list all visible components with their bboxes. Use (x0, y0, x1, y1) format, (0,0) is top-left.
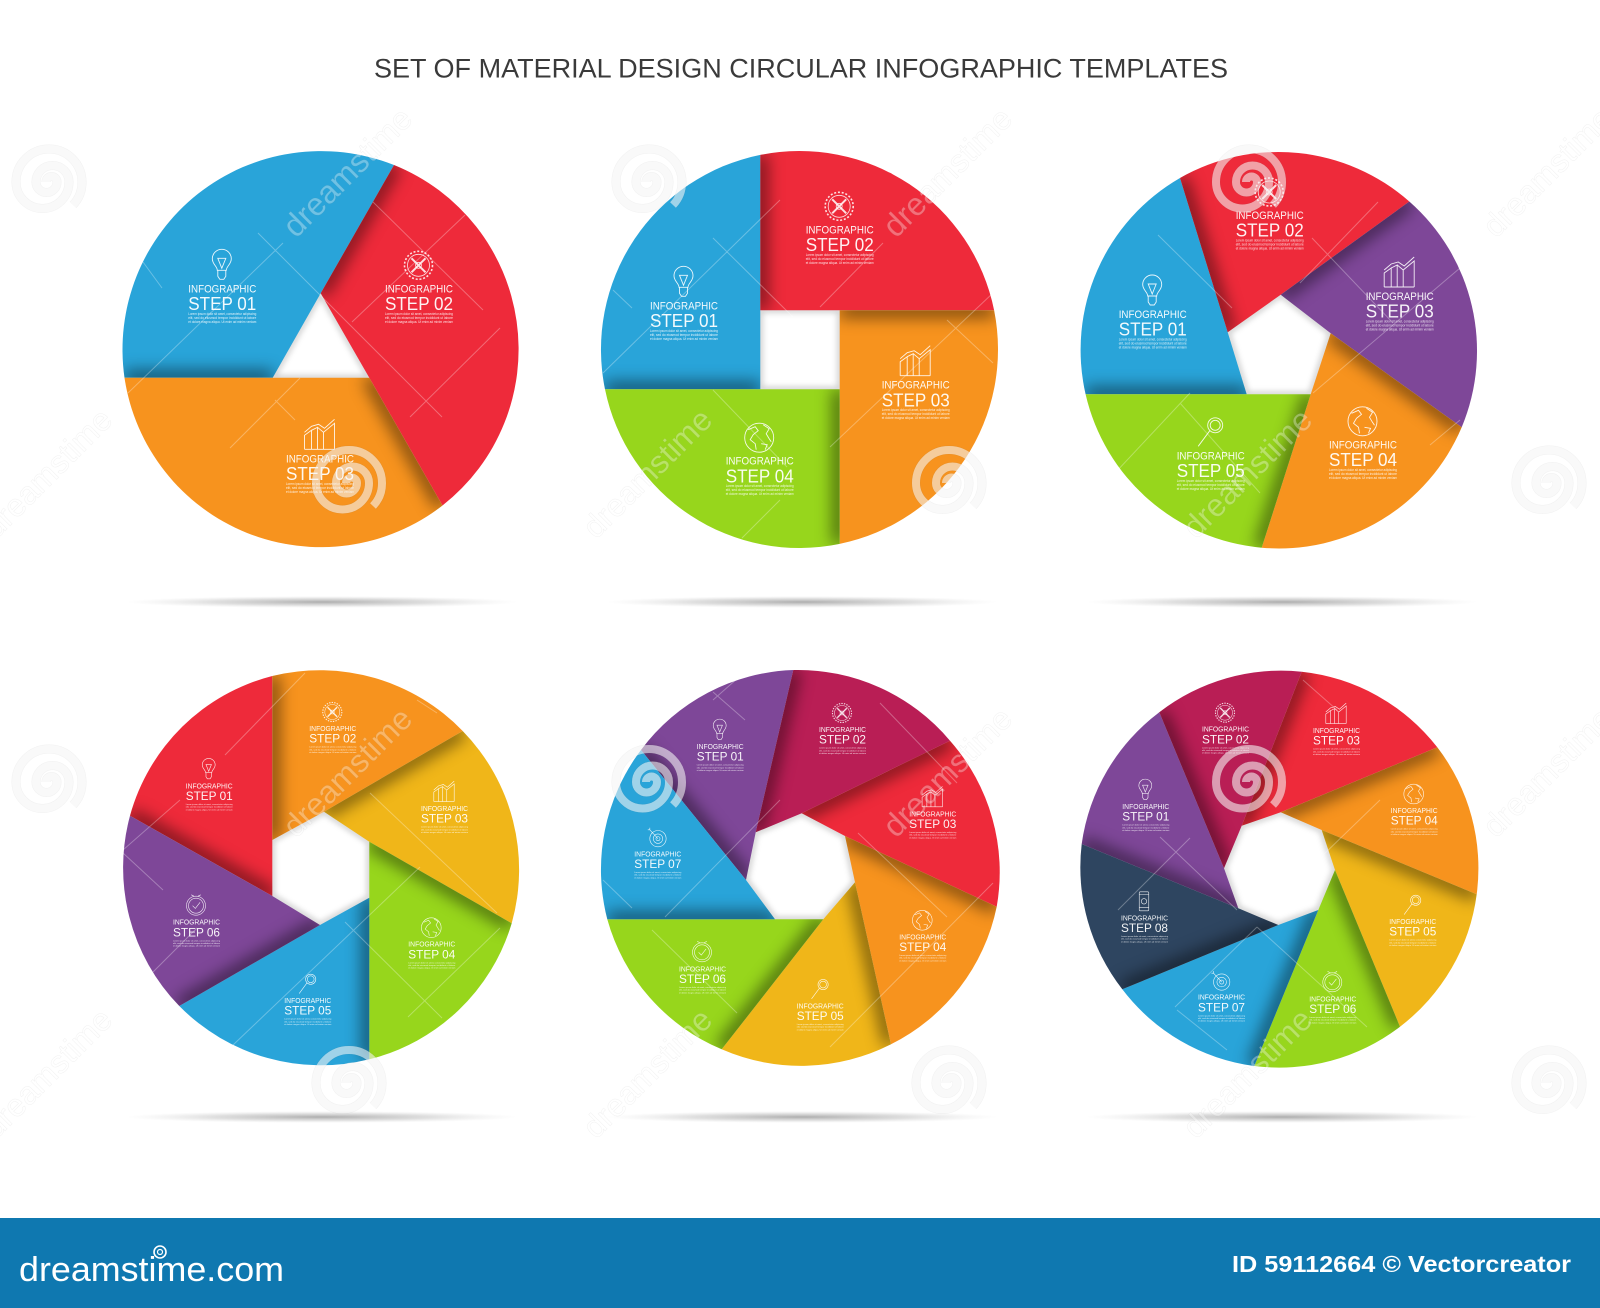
watermark overlay: dreamstime (875, 700, 1019, 844)
label: step 04 (726, 423, 794, 496)
label: step 06: et dolore magna aliqua. Ut enim ad minim veniam (1309, 1021, 1356, 1024)
segment: step 04 green (369, 842, 512, 1059)
label: step 02 (1236, 178, 1304, 250)
segment: step 03 red (802, 741, 1000, 907)
segment: step 01 blue (601, 155, 760, 389)
label: step 07: Lorem ipsum dolor sit amet, consectetur adipiscing (1198, 1014, 1246, 1017)
label: step 02: elit, sed do eiusmod tempor incididunt ut labore (806, 257, 874, 261)
label: step 03: elit, sed do eiusmod tempor incididunt ut labore (421, 828, 469, 831)
label: step 04: STEP 04 (899, 940, 947, 954)
label: step 07: et dolore magna aliqua. Ut enim ad minim veniam (1198, 1020, 1245, 1023)
label: step 01: et dolore magna aliqua. Ut enim ad minim veniam (1119, 346, 1187, 350)
label: step 02: STEP 02 (309, 732, 357, 746)
label: step 07: STEP 07 (1198, 1000, 1245, 1014)
segment: step 01 red (130, 676, 272, 896)
label: step 04: Lorem ipsum dolor sit amet, consectetur adipiscing (726, 484, 794, 488)
label: step 03: Lorem ipsum dolor sit amet, consectetur adipiscing (421, 826, 469, 829)
segment: step 03 orange (840, 310, 998, 544)
label: step 03 (1313, 703, 1361, 756)
label: step 03: et dolore magna aliqua. Ut enim ad minim veniam (1366, 328, 1434, 332)
wheel: 7 steps (601, 670, 1000, 1066)
segment: step 03 red (1242, 672, 1437, 826)
label: step 02: INFOGRAPHIC (385, 283, 453, 295)
label: step 03 (1366, 257, 1434, 332)
label: step 05: Lorem ipsum dolor sit amet, consectetur adipiscing (1177, 479, 1245, 483)
label: step 05: STEP 05 (1177, 461, 1245, 481)
label: step 04: STEP 04 (1329, 450, 1397, 470)
segment: step 08 navy (1080, 844, 1278, 989)
label: step 06: Lorem ipsum dolor sit amet, consectetur adipiscing (679, 986, 727, 989)
label: step 05: STEP 05 (1389, 925, 1437, 939)
label: step 04: et dolore magna aliqua. Ut enim ad minim veniam (1391, 833, 1438, 836)
label: step 05: Lorem ipsum dolor sit amet, consectetur adipiscing (1389, 939, 1437, 942)
label: step 05 (284, 974, 332, 1026)
segment: step 02 crimson (756, 670, 950, 832)
label: step 02: Lorem ipsum dolor sit amet, consectetur adipiscing (1236, 238, 1304, 242)
label: step 02: et dolore magna aliqua. Ut enim ad minim veniam (385, 320, 453, 324)
label: step 04: Lorem ipsum dolor sit amet, consectetur adipiscing (1329, 468, 1397, 472)
wheel: 6 steps (123, 670, 519, 1065)
label: step 01: elit, sed do eiusmod tempor incididunt ut labore (1119, 342, 1187, 346)
label: step 01: et dolore magna aliqua. Ut enim ad minim veniam (650, 337, 718, 341)
label: step 02: STEP 02 (1236, 221, 1304, 241)
footer banner (0, 1218, 1600, 1308)
label: step 04: INFOGRAPHIC (1391, 806, 1438, 815)
label: step 02: et dolore magna aliqua. Ut enim ad minim veniam (1236, 246, 1304, 250)
label: step 06: et dolore magna aliqua. Ut enim ad minim veniam (173, 945, 220, 948)
label: step 03: elit, sed do eiusmod tempor incididunt ut labore (286, 486, 354, 490)
segment: step 05 blue (179, 898, 369, 1065)
label: step 06: Lorem ipsum dolor sit amet, consectetur adipiscing (1309, 1016, 1357, 1019)
wheel: 3 steps (122, 151, 519, 547)
label: step 03 (421, 781, 469, 834)
watermark overlay: dreamstime (875, 100, 1019, 244)
label: step 03 (882, 346, 950, 420)
label: step 01: INFOGRAPHIC (1122, 802, 1170, 811)
label: step 02: STEP 02 (819, 733, 866, 747)
label: step 07: INFOGRAPHIC (1198, 993, 1246, 1002)
label: step 08 (1121, 892, 1169, 943)
segment: step 04 orange (845, 836, 997, 1044)
label: step 05: et dolore magna aliqua. Ut enim ad minim veniam (1389, 944, 1436, 947)
segment: step 04 orange (1281, 747, 1478, 894)
label: step 03: INFOGRAPHIC (421, 804, 469, 813)
label: step 04: INFOGRAPHIC (899, 932, 947, 941)
label: step 01: elit, sed do eiusmod tempor incididunt ut labore (188, 316, 257, 320)
label: step 05: INFOGRAPHIC (797, 1001, 844, 1010)
wheel: 8 steps (1080, 671, 1478, 1068)
label: step 05 (1389, 895, 1437, 947)
ground shadows under wheels (126, 596, 1478, 1123)
segment: step 05 yellow (1322, 830, 1477, 1027)
label: step 02: Lorem ipsum dolor sit amet, consectetur adipiscing (806, 253, 874, 257)
label: step 04: Lorem ipsum dolor sit amet, consectetur adipiscing (1391, 828, 1438, 831)
label: step 03: elit, sed do eiusmod tempor incididunt ut labore (1313, 750, 1361, 753)
label: step 08: elit, sed do eiusmod tempor incididunt ut labore (1121, 938, 1169, 941)
label: step 02: et dolore magna aliqua. Ut enim ad minim veniam (806, 261, 874, 265)
label: step 06: et dolore magna aliqua. Ut enim ad minim veniam (679, 991, 726, 994)
label: step 02: et dolore magna aliqua. Ut enim ad minim veniam (309, 751, 356, 754)
label: step 02: et dolore magna aliqua. Ut enim ad minim veniam (1202, 752, 1249, 755)
watermark overlay: dreamstime (1175, 1001, 1319, 1145)
label: step 04: INFOGRAPHIC (1329, 439, 1397, 451)
label: step 02: elit, sed do eiusmod tempor incididunt ut labore (1236, 242, 1304, 246)
label: step 03: INFOGRAPHIC (909, 809, 957, 818)
label: step 05: elit, sed do eiusmod tempor incididunt ut labore (284, 1020, 332, 1023)
label: step 05: Lorem ipsum dolor sit amet, consectetur adipiscing (797, 1023, 844, 1026)
label: step 06: elit, sed do eiusmod tempor incididunt ut labore (679, 989, 727, 992)
label: step 04: elit, sed do eiusmod tempor incididunt ut labore (899, 957, 947, 960)
segment: step 05 yellow (722, 882, 891, 1066)
segment: step 06 green (1254, 870, 1400, 1068)
label: step 03: et dolore magna aliqua. Ut enim ad minim veniam (909, 836, 956, 839)
label: step 04 (899, 910, 947, 962)
label: step 04: STEP 04 (726, 466, 794, 486)
label: step 02 (819, 703, 867, 755)
segment: step 02 red (321, 165, 519, 506)
label: step 05: elit, sed do eiusmod tempor incididunt ut labore (1177, 483, 1245, 487)
label: step 01: elit, sed do eiusmod tempor incididunt ut labore (186, 806, 234, 809)
label: step 03 (909, 786, 957, 839)
label: step 01: STEP 01 (1119, 320, 1187, 340)
label: step 01: STEP 01 (650, 311, 718, 331)
label: step 08: INFOGRAPHIC (1121, 913, 1169, 922)
label: step 01: Lorem ipsum dolor sit amet, consectetur adipiscing (1119, 338, 1187, 342)
label: step 03: elit, sed do eiusmod tempor incididunt ut labore (909, 834, 957, 837)
label: step 01: STEP 01 (186, 789, 233, 803)
label: step 04: elit, sed do eiusmod tempor incididunt ut labore (726, 488, 794, 492)
label: step 02: Lorem ipsum dolor sit amet, consectetur adipiscing (385, 312, 453, 316)
label: step 03: STEP 03 (1313, 734, 1360, 748)
label: step 06: STEP 06 (173, 925, 220, 939)
footer image id and credit: ID 59112664 © Vectorcreator (1232, 1251, 1571, 1277)
label: step 01: et dolore magna aliqua. Ut enim ad minim veniam (188, 320, 257, 324)
label: step 08: et dolore magna aliqua. Ut enim ad minim veniam (1121, 940, 1168, 943)
label: step 02 (1202, 703, 1250, 755)
label: step 02: INFOGRAPHIC (1236, 210, 1304, 222)
label: step 02: et dolore magna aliqua. Ut enim ad minim veniam (819, 752, 866, 755)
label: step 05: elit, sed do eiusmod tempor incididunt ut labore (797, 1026, 845, 1029)
segment: step 02 red (760, 151, 994, 310)
watermark overlay: dreamstime (275, 100, 419, 244)
label: step 01: Lorem ipsum dolor sit amet, consectetur adipiscing (1122, 824, 1170, 827)
label: step 05: elit, sed do eiusmod tempor incididunt ut labore (1389, 941, 1437, 944)
label: step 01: Lorem ipsum dolor sit amet, consectetur adipiscing (697, 764, 744, 767)
label: step 02: INFOGRAPHIC (309, 724, 357, 733)
label: step 03: STEP 03 (882, 390, 950, 410)
label: step 07 (1198, 971, 1246, 1023)
label: step 01: INFOGRAPHIC (186, 781, 233, 790)
segment: step 02 crimson (1159, 671, 1302, 868)
label: step 02: Lorem ipsum dolor sit amet, consectetur adipiscing (1202, 746, 1250, 749)
watermark overlay: dreamstime (575, 401, 719, 545)
segment: step 03 yellow (324, 731, 519, 923)
label: step 01: et dolore magna aliqua. Ut enim ad minim veniam (1122, 829, 1169, 832)
label: step 02: INFOGRAPHIC (806, 224, 874, 236)
label: step 03: et dolore magna aliqua. Ut enim ad minim veniam (286, 490, 354, 494)
label: step 04: INFOGRAPHIC (408, 940, 456, 949)
label: step 01: elit, sed do eiusmod tempor incididunt ut labore (1122, 826, 1170, 829)
label: step 04: STEP 04 (408, 947, 456, 961)
label: step 04 (1391, 784, 1439, 836)
label: step 03: INFOGRAPHIC (1313, 726, 1361, 735)
segment: step 05 green (1086, 394, 1311, 548)
label: step 05: et dolore magna aliqua. Ut enim ad minim veniam (1177, 487, 1245, 491)
label: step 06 (1309, 971, 1357, 1024)
label: step 07: elit, sed do eiusmod tempor incididunt ut labore (1198, 1017, 1246, 1020)
label: step 04: elit, sed do eiusmod tempor incididunt ut labore (1391, 830, 1439, 833)
label: step 04 (408, 918, 456, 970)
label: step 04: et dolore magna aliqua. Ut enim ad minim veniam (1329, 476, 1397, 480)
label: step 01: Lorem ipsum dolor sit amet, consectetur adipiscing (186, 803, 233, 806)
label: step 07: elit, sed do eiusmod tempor incididunt ut labore (634, 874, 682, 877)
label: step 04: Lorem ipsum dolor sit amet, consectetur adipiscing (408, 961, 456, 964)
label: step 03: STEP 03 (286, 464, 354, 484)
label: step 03: Lorem ipsum dolor sit amet, consectetur adipiscing (1366, 320, 1434, 324)
segment: step 06 green (607, 919, 823, 1049)
label: step 01: STEP 01 (697, 750, 744, 764)
label: step 07: STEP 07 (634, 857, 682, 871)
label: step 02: INFOGRAPHIC (1202, 725, 1250, 734)
label: step 03: Lorem ipsum dolor sit amet, consectetur adipiscing (1313, 748, 1361, 751)
label: step 03: Lorem ipsum dolor sit amet, consectetur adipiscing (882, 408, 950, 412)
label: step 06 (679, 941, 727, 994)
watermark overlay (0, 100, 1600, 1145)
label: step 05 (797, 979, 845, 1031)
label: step 06: STEP 06 (679, 972, 726, 986)
label: step 01 (186, 758, 234, 811)
watermark overlay: dreamstime (275, 700, 419, 844)
label: step 05: INFOGRAPHIC (284, 996, 332, 1005)
label: step 04 (1329, 407, 1397, 480)
label: step 06: elit, sed do eiusmod tempor incididunt ut labore (173, 942, 221, 945)
label: step 06: Lorem ipsum dolor sit amet, consectetur adipiscing (173, 939, 221, 942)
label: step 06: INFOGRAPHIC (1309, 994, 1357, 1003)
segment: step 01 blue (1081, 178, 1247, 394)
label: step 04: INFOGRAPHIC (726, 456, 794, 468)
label: step 01: Lorem ipsum dolor sit amet, consectetur adipiscing (650, 329, 718, 333)
wheel: 5 steps (1081, 152, 1477, 548)
label: step 02: elit, sed do eiusmod tempor incididunt ut labore (309, 748, 357, 751)
label: step 02: elit, sed do eiusmod tempor incididunt ut labore (385, 316, 453, 320)
label: step 04: et dolore magna aliqua. Ut enim ad minim veniam (408, 967, 455, 970)
label: step 05: INFOGRAPHIC (1177, 450, 1245, 462)
label: step 02 (806, 192, 874, 265)
label: step 05: INFOGRAPHIC (1389, 917, 1437, 926)
label: step 03: INFOGRAPHIC (286, 453, 354, 465)
label: step 02: STEP 02 (1202, 732, 1249, 746)
segment: step 03 purple (1281, 202, 1477, 427)
label: step 04: elit, sed do eiusmod tempor incididunt ut labore (1329, 472, 1397, 476)
label: step 04: Lorem ipsum dolor sit amet, consectetur adipiscing (899, 954, 947, 957)
label: step 02: Lorem ipsum dolor sit amet, consectetur adipiscing (309, 746, 357, 749)
label: step 06: INFOGRAPHIC (679, 964, 727, 973)
label: step 04: et dolore magna aliqua. Ut enim ad minim veniam (726, 492, 794, 496)
segment: step 01 blue (122, 151, 394, 378)
label: step 04: STEP 04 (1391, 814, 1438, 828)
label: step 01: INFOGRAPHIC (697, 742, 744, 751)
label: step 01: STEP 01 (1122, 810, 1170, 824)
segment: step 01 purple (1082, 712, 1238, 908)
label: step 01: elit, sed do eiusmod tempor incididunt ut labore (650, 333, 718, 337)
segment: step 04 green (605, 389, 840, 548)
label: step 06: STEP 06 (1309, 1002, 1357, 1016)
label: step 01: Lorem ipsum dolor sit amet, consectetur adipiscing (188, 312, 257, 316)
label: step 03: INFOGRAPHIC (882, 380, 950, 392)
segment: step 02 orange (272, 670, 463, 840)
segment: step 04 orange (1262, 333, 1462, 548)
label: step 03: elit, sed do eiusmod tempor incididunt ut labore (882, 412, 950, 416)
label: step 03: STEP 03 (421, 812, 468, 826)
label: step 03 (286, 419, 354, 494)
segment: step 02 red (1180, 152, 1409, 332)
label: step 05: et dolore magna aliqua. Ut enim ad minim veniam (284, 1023, 331, 1026)
label: step 05: STEP 05 (797, 1009, 844, 1023)
label: step 07 (634, 828, 682, 879)
label: step 01: elit, sed do eiusmod tempor incididunt ut labore (697, 766, 745, 769)
label: step 04: elit, sed do eiusmod tempor incididunt ut labore (408, 964, 456, 967)
label: step 07: INFOGRAPHIC (634, 849, 682, 858)
label: step 07: Lorem ipsum dolor sit amet, consectetur adipiscing (634, 871, 682, 874)
label: step 02 (385, 251, 453, 324)
label: step 01: STEP 01 (188, 294, 256, 314)
label: step 03: INFOGRAPHIC (1366, 291, 1434, 303)
label: step 03: elit, sed do eiusmod tempor incididunt ut labore (1366, 324, 1434, 328)
label: step 02: elit, sed do eiusmod tempor incididunt ut labore (819, 749, 867, 752)
label: step 03: STEP 03 (909, 817, 957, 831)
label: step 03: et dolore magna aliqua. Ut enim ad minim veniam (882, 416, 950, 420)
label: step 05 (1177, 418, 1245, 491)
label: step 03: et dolore magna aliqua. Ut enim ad minim veniam (1313, 753, 1360, 756)
watermark overlay: dreamstime (1175, 401, 1319, 545)
label: step 01 (188, 249, 257, 324)
segment: step 03 orange (124, 378, 442, 547)
label: step 07: et dolore magna aliqua. Ut enim ad minim veniam (634, 876, 681, 879)
label: step 03: STEP 03 (1366, 302, 1434, 322)
label: step 05: et dolore magna aliqua. Ut enim ad minim veniam (797, 1028, 844, 1031)
label: step 06 (173, 895, 221, 948)
label: step 08: STEP 08 (1121, 921, 1168, 935)
label: step 03: et dolore magna aliqua. Ut enim ad minim veniam (421, 831, 468, 834)
label: step 06: elit, sed do eiusmod tempor incididunt ut labore (1309, 1019, 1357, 1022)
label: step 02: STEP 02 (806, 235, 874, 255)
label: step 01: et dolore magna aliqua. Ut enim ad minim veniam (697, 769, 744, 772)
label: step 04: et dolore magna aliqua. Ut enim ad minim veniam (899, 959, 946, 962)
watermark overlay: dreamstime (575, 1001, 719, 1145)
label: step 01 (1122, 779, 1170, 832)
label: step 02: INFOGRAPHIC (819, 725, 867, 734)
segment: step 06 purple (123, 816, 320, 1006)
label: step 01: INFOGRAPHIC (650, 300, 718, 312)
label: step 06: INFOGRAPHIC (173, 918, 221, 927)
footer logo: dreamstime.com (19, 1251, 284, 1289)
segment: step 07 blue (1122, 910, 1318, 1066)
label: step 05: Lorem ipsum dolor sit amet, consectetur adipiscing (284, 1018, 332, 1021)
label: step 03: Lorem ipsum dolor sit amet, consectetur adipiscing (909, 831, 957, 834)
segment: step 01 purple (641, 670, 793, 880)
title: SET OF MATERIAL DESIGN CIRCULAR INFOGRAPHIC TEMPLATES (374, 54, 1228, 84)
label: step 01: INFOGRAPHIC (188, 283, 256, 295)
label: step 01 (1119, 275, 1187, 350)
label: step 08: Lorem ipsum dolor sit amet, consectetur adipiscing (1121, 935, 1169, 938)
label: step 02: elit, sed do eiusmod tempor incididunt ut labore (1202, 749, 1250, 752)
label: step 01 (697, 719, 745, 772)
label: step 02: STEP 02 (385, 294, 453, 314)
label: step 03: Lorem ipsum dolor sit amet, consectetur adipiscing (286, 482, 354, 486)
label: step 01: INFOGRAPHIC (1119, 309, 1187, 321)
wheel: 4 steps (601, 151, 998, 548)
label: step 01 (650, 266, 718, 341)
label: step 01: et dolore magna aliqua. Ut enim ad minim veniam (186, 808, 233, 811)
label: step 05: STEP 05 (284, 1004, 332, 1018)
label: step 02: Lorem ipsum dolor sit amet, consectetur adipiscing (819, 747, 867, 750)
segment: step 07 blue (601, 750, 775, 919)
label: step 02 (309, 702, 357, 754)
